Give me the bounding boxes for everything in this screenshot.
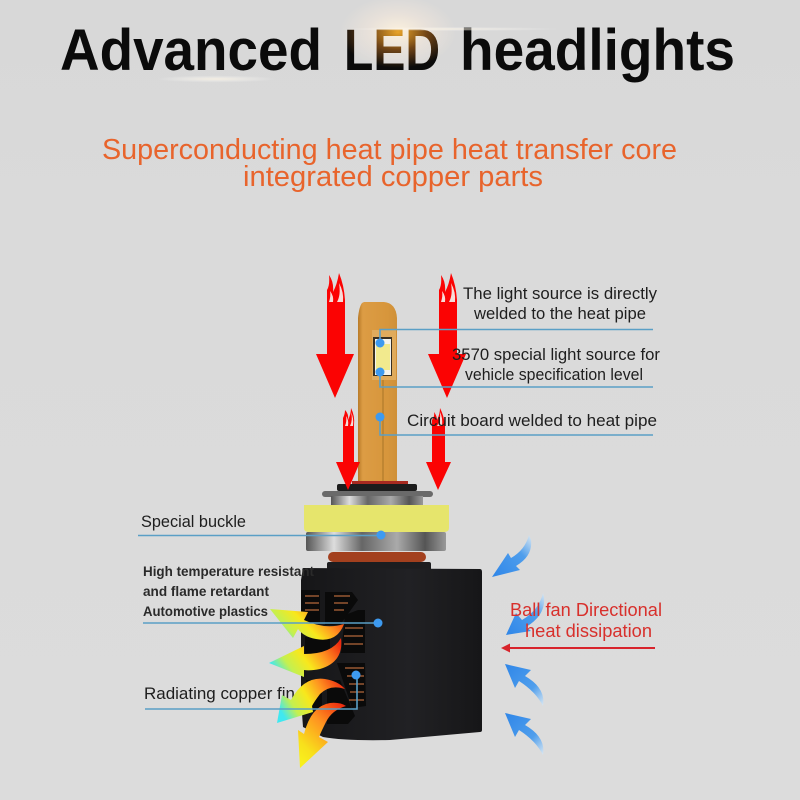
label: 3570	[452, 346, 661, 384]
arrow: cool 4	[505, 713, 543, 755]
subtitle	[102, 134, 677, 193]
arrow: large right	[428, 273, 466, 398]
label: ball fan: Ball fan Directional	[510, 599, 662, 620]
red base strip	[352, 481, 408, 484]
bulb illustration	[301, 302, 482, 740]
arrow: cool 2	[506, 593, 544, 635]
o-ring	[328, 552, 426, 562]
label: special buckle: Special buckle	[141, 513, 246, 531]
label: plastics: Automotive plastics	[143, 604, 268, 619]
arrow: large left	[316, 273, 354, 398]
subtitle: integrated copper parts	[243, 161, 543, 193]
label: light source: The light source is directly	[463, 285, 658, 303]
collar	[327, 562, 431, 572]
red heat arrows	[316, 273, 466, 490]
copper fins	[301, 590, 366, 724]
bulb flange	[322, 484, 433, 506]
yellow disc	[304, 505, 449, 532]
heat pipe	[358, 302, 397, 482]
cool air arrows	[492, 535, 544, 755]
label: ball fan	[510, 599, 662, 641]
title: LED	[344, 18, 440, 83]
arrow: small right	[426, 408, 451, 490]
label: 3570: vehicle specification level	[465, 366, 643, 384]
LED chip	[373, 337, 392, 376]
leader dots left	[352, 530, 386, 680]
label: light source	[463, 285, 658, 323]
labels left	[141, 513, 315, 703]
arrow: fan direction	[501, 644, 655, 652]
arrow: cool 1	[492, 535, 531, 577]
label: circuit board: Circuit board welded to heat pipe	[407, 412, 657, 430]
hot air arrows	[269, 609, 346, 768]
label: plastics: High temperature resistant	[143, 564, 315, 579]
leader lines top	[380, 330, 653, 435]
arrow: hot air 2	[269, 638, 341, 677]
arrow: hot air 4	[298, 703, 346, 768]
heat sink body	[301, 568, 482, 740]
label: plastics	[143, 564, 315, 619]
pipe seam	[382, 378, 384, 482]
arrow: hot air 3	[277, 679, 345, 723]
arrow: cool 3	[505, 664, 543, 706]
leader lines left	[138, 536, 381, 709]
title glow	[156, 0, 560, 82]
metal ring	[306, 532, 446, 551]
title	[60, 18, 735, 83]
label: 3570: 3570 special light source for	[452, 346, 661, 364]
flame highlights	[329, 283, 455, 426]
arrow: hot air 1	[270, 609, 344, 640]
label: light source: welded to the heat pipe	[473, 305, 646, 323]
leader dots top	[376, 338, 384, 422]
labels top right	[407, 285, 661, 430]
label: ball fan: heat dissipation	[525, 620, 652, 641]
title: headlights	[460, 18, 735, 83]
arrow: small left	[336, 408, 360, 490]
subtitle: Superconducting heat pipe heat transfer core	[102, 134, 677, 166]
label: plastics: and flame retardant	[143, 584, 269, 599]
title: Advanced	[60, 18, 322, 83]
LED recess	[372, 330, 396, 380]
label: radiating copper fin: Radiating copper fin	[144, 684, 295, 703]
